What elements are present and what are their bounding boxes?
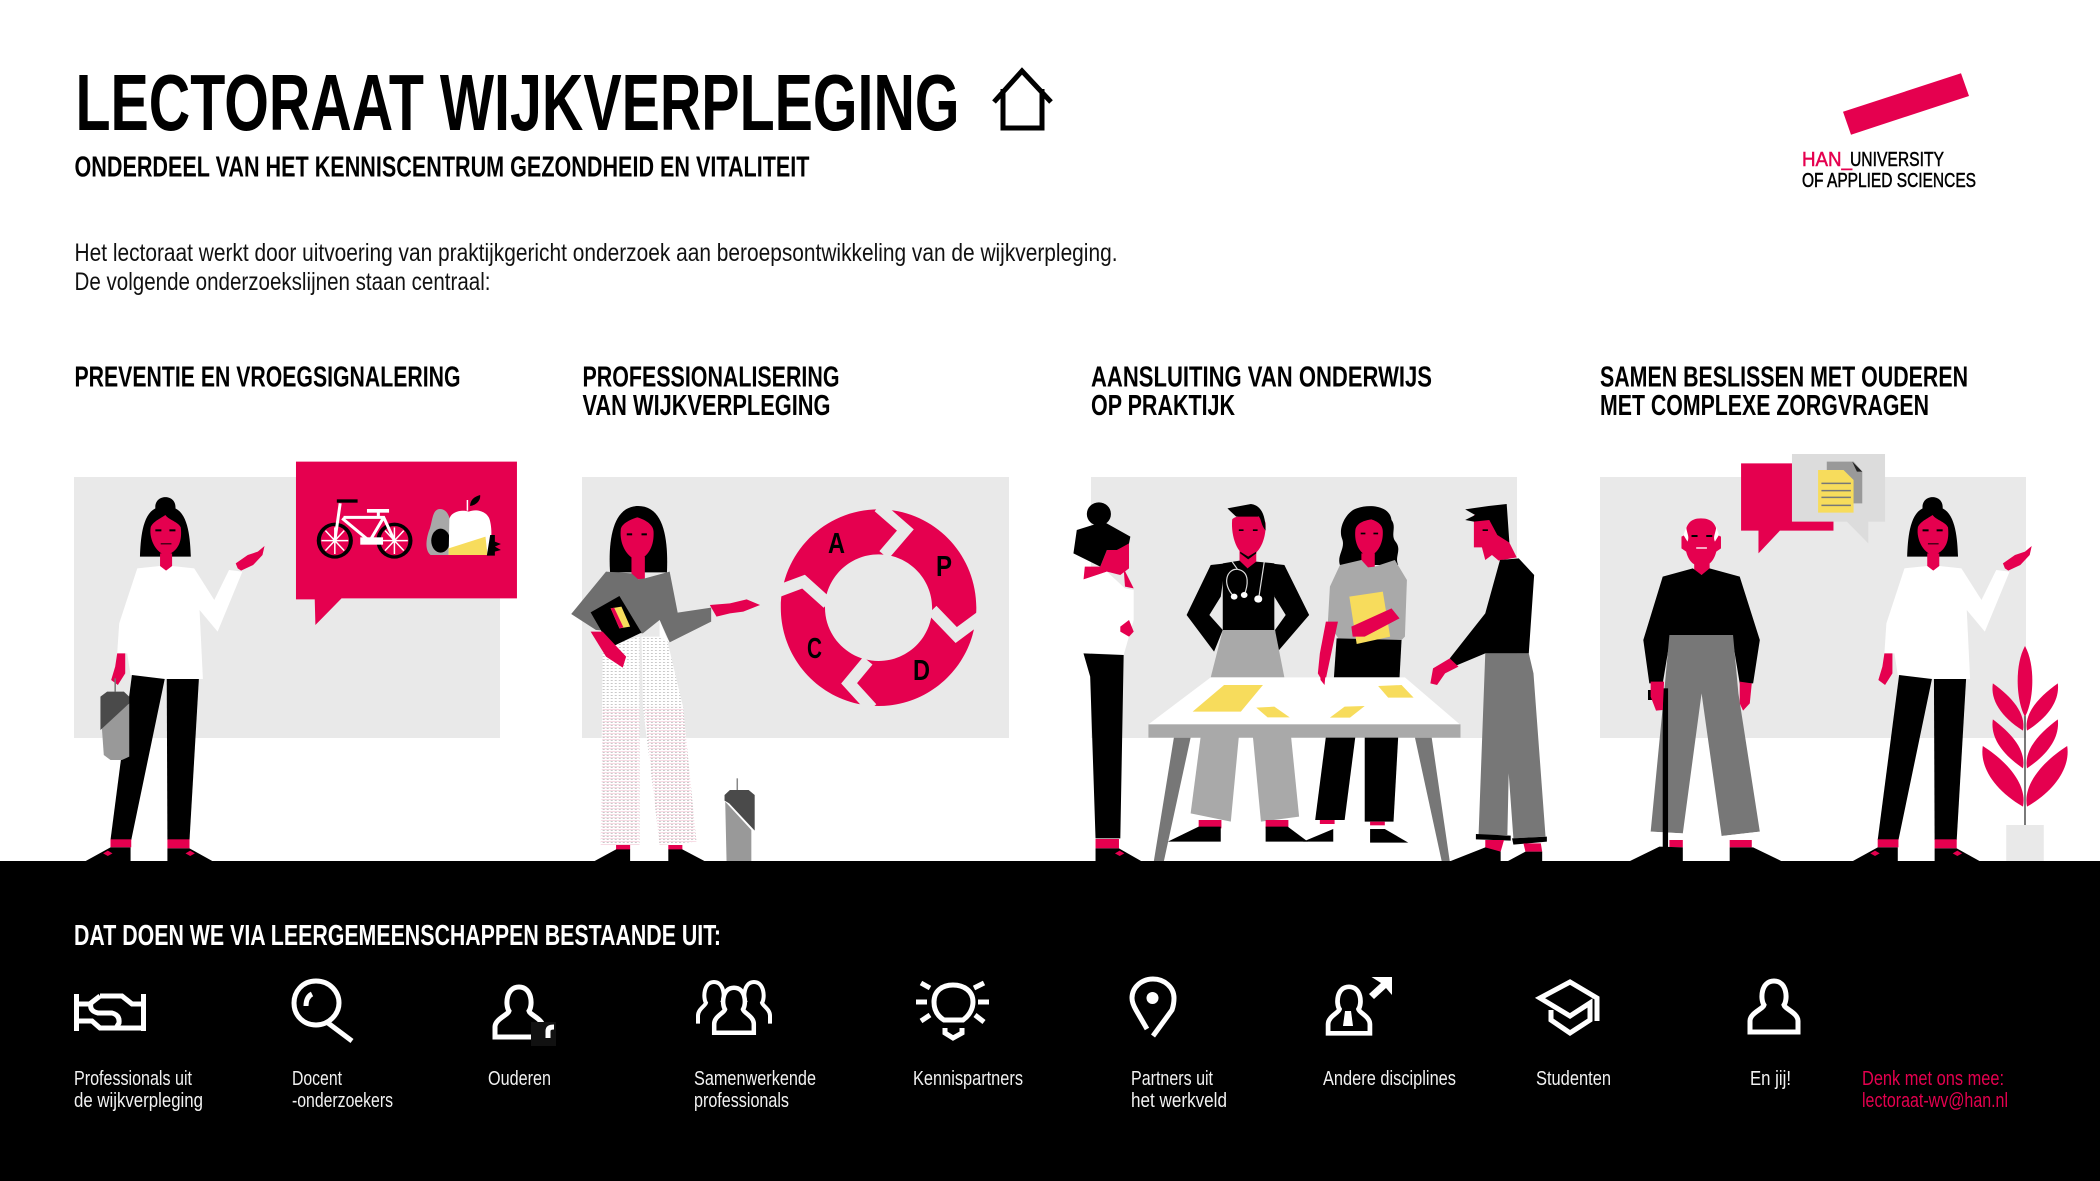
chart: PDCA cycle [777, 507, 981, 708]
label: studenten: Studenten [1536, 1068, 1611, 1090]
label: professionals: Professionals uit [74, 1068, 192, 1090]
chart: PDCA cycle: D [913, 655, 930, 687]
heading: research line 3: OP PRAKTIJK [1091, 390, 1235, 422]
label: en jij: En jij! [1750, 1068, 1791, 1090]
logo: HAN University of Applied Sciences: HAN_ [1802, 149, 1853, 171]
label: samenwerkende professionals [694, 1068, 816, 1112]
logo: HAN University of Applied Sciences: UNIVERSITY [1850, 149, 1944, 171]
intro text: De volgende onderzoekslijnen staan centraal: [74, 268, 490, 296]
icon: bottle [725, 778, 755, 861]
icon: bag [100, 678, 129, 760]
label: professionals [74, 1068, 203, 1112]
title: LECTORAAT WIJKVERPLEGING [76, 58, 960, 147]
icon: group of people [698, 982, 770, 1033]
panel: grey background 3 [1091, 477, 1517, 738]
label: partners uit het werkveld: het werkveld [1131, 1090, 1227, 1112]
person: woman with folder [1303, 506, 1408, 843]
label: samenwerkende professionals: professionals [694, 1090, 789, 1112]
chart: PDCA cycle: A [828, 528, 845, 560]
person: woman with book [571, 506, 760, 861]
logo: HAN University of Applied Sciences: OF APPLIED SCIENCES [1802, 170, 1976, 192]
chart: PDCA cycle: P [936, 551, 952, 583]
contact call to action: Denk met ons mee: [1862, 1068, 2004, 1090]
panel: grey background 1 [74, 477, 500, 738]
subtitle: ONDERDEEL VAN HET KENNISCENTRUM GEZONDHEID EN VITALITEIT [74, 152, 810, 184]
person: older man with cane [1629, 518, 1782, 861]
label: docent-onderzoekers [292, 1068, 393, 1112]
person: man leaning over table [1430, 504, 1547, 861]
person: woman in white [85, 497, 265, 861]
label: samenwerkende professionals: Samenwerkende [694, 1068, 816, 1090]
person: woman in white (right) [1852, 497, 2032, 861]
heading: research line 3 [1091, 362, 1432, 422]
icon: location pin [1132, 979, 1174, 1036]
plant [1982, 646, 2068, 861]
logo: HAN University of Applied Sciences [1802, 73, 1976, 192]
panel: grey background 4 [1600, 477, 2026, 738]
label: docent-onderzoekers: Docent [292, 1068, 342, 1090]
icon: person [1750, 981, 1798, 1032]
footer heading: DAT DOEN WE VIA LEERGEMEENSCHAPPEN BESTAANDE UIT: [74, 920, 721, 952]
label: andere disciplines: Andere disciplines [1323, 1068, 1456, 1090]
intro text [74, 239, 1118, 296]
label: docent-onderzoekers: -onderzoekers [292, 1090, 393, 1112]
label: partners uit het werkveld [1131, 1068, 1227, 1112]
icon: handshake [76, 994, 144, 1031]
contact call to action: lectoraat-wv@han.nl [1862, 1090, 2008, 1112]
person: doctor with stethoscope [1168, 504, 1309, 842]
heading: research line 2: VAN WIJKVERPLEGING [582, 390, 830, 422]
speech bubble: document [1741, 454, 1885, 553]
panel: black footer band [0, 861, 2100, 1181]
chart: PDCA cycle: C [807, 633, 822, 665]
label: kennispartners: Kennispartners [913, 1068, 1023, 1090]
heading: research line 2: PROFESSIONALISERING [582, 362, 840, 394]
label: ouderen: Ouderen [488, 1068, 551, 1090]
icon: light bulb [916, 983, 989, 1038]
heading: research line 1: PREVENTIE EN VROEGSIGNALERING [74, 362, 460, 394]
heading: research line 4: MET COMPLEXE ZORGVRAGEN [1600, 390, 1929, 422]
icon: house [994, 71, 1051, 128]
person: woman with bun [1073, 502, 1142, 861]
icon: older person with cane [495, 987, 556, 1046]
icon: graduation cap [1540, 982, 1597, 1033]
heading: research line 2 [582, 362, 840, 422]
panel: grey background 2 [582, 477, 1009, 738]
heading: research line 3: AANSLUITING VAN ONDERWIJS [1091, 362, 1432, 394]
label: partners uit het werkveld: Partners uit [1131, 1068, 1213, 1090]
icon: magnifier [294, 981, 352, 1041]
heading: research line 4 [1600, 362, 1968, 422]
icon: person with arrow [1328, 977, 1392, 1033]
table with yellow notes [1148, 670, 1460, 861]
heading: research line 4: SAMEN BESLISSEN MET OUDEREN [1600, 362, 1968, 394]
intro text: Het lectoraat werkt door uitvoering van praktijkgericht onderzoek aan beroepsontwikkeling van de wijkverpleging. [74, 239, 1118, 267]
label: professionals: de wijkverpleging [74, 1090, 203, 1112]
speech bubble: bicycle and healthy food [296, 462, 517, 625]
contact call to action [1862, 1068, 2008, 1112]
